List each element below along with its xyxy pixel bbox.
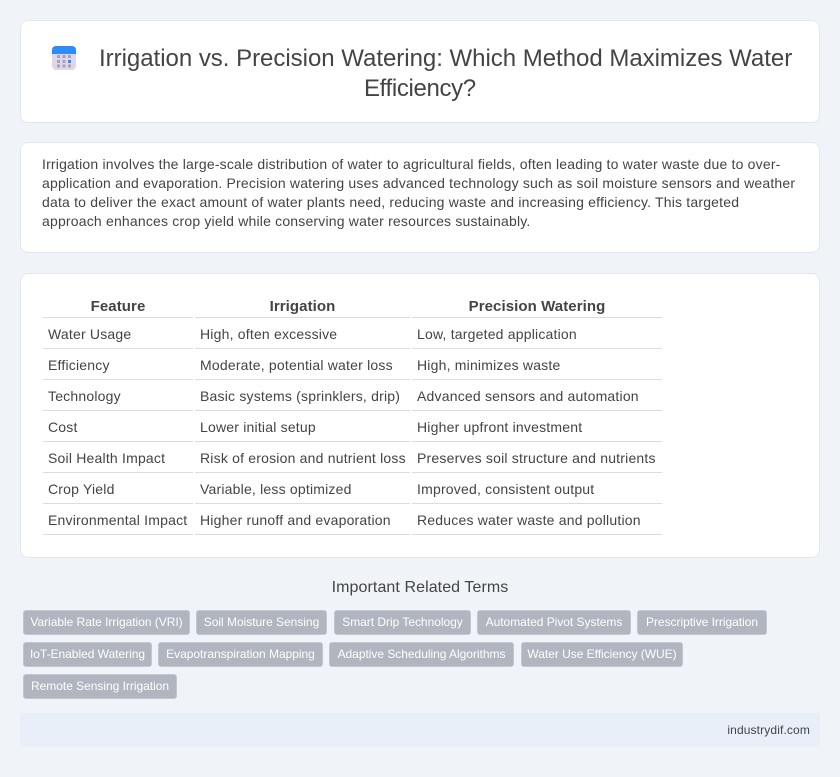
- title: [99, 45, 792, 102]
- tag list: related terms: Smart Drip Technology: [342, 615, 463, 629]
- tag list: related terms: Automated Pivot Systems: [486, 615, 622, 629]
- table: feature comparison: Risk of erosion and nutrient loss: [200, 450, 406, 466]
- text block: introduction paragraph: application and evaporation. Precision watering uses advanced technology such as soil moisture sensors and weather: [42, 175, 795, 191]
- tag list: related terms: Remote Sensing Irrigation: [31, 679, 169, 693]
- table header: [43, 298, 662, 318]
- footer bar: [20, 713, 820, 747]
- panel: comparison table: [20, 273, 820, 558]
- title: Efficiency?: [364, 75, 476, 102]
- table: feature comparison: High, minimizes waste: [417, 357, 560, 373]
- table: feature comparison: Higher runoff and evaporation: [200, 512, 391, 528]
- tag list: related terms: Prescriptive Irrigation: [646, 615, 758, 629]
- table: feature comparison: Low, targeted application: [417, 326, 577, 342]
- panel: title card: [20, 20, 820, 123]
- table: feature comparison: Advanced sensors and automation: [417, 388, 639, 404]
- icon: calendar: [52, 46, 76, 70]
- tag list: related terms: Evapotranspiration Mapping: [166, 647, 315, 661]
- title: Irrigation vs. Precision Watering: Which Method Maximizes Water: [99, 45, 792, 72]
- table header: Irrigation: [270, 298, 335, 315]
- table: feature comparison: [43, 298, 662, 535]
- table: feature comparison: Preserves soil structure and nutrients: [417, 450, 656, 466]
- table: feature comparison: Variable, less optimized: [200, 481, 352, 497]
- tag list: related terms: Variable Rate Irrigation (VRI): [30, 615, 183, 629]
- text block: introduction paragraph: approach enhances crop yield while conserving water resources sustainably.: [42, 213, 531, 229]
- tag list: related terms: Adaptive Scheduling Algorithms: [338, 647, 505, 661]
- table: feature comparison: Lower initial setup: [200, 419, 316, 435]
- table: feature comparison: Crop Yield: [48, 481, 115, 497]
- table: feature comparison: Water Usage: [48, 326, 131, 342]
- footer credit: industrydif.com: [727, 723, 810, 737]
- table: feature comparison: High, often excessive: [200, 326, 337, 342]
- table: feature comparison: Soil Health Impact: [48, 450, 165, 466]
- table: feature comparison: Efficiency: [48, 357, 110, 373]
- table: feature comparison: Improved, consistent output: [417, 481, 594, 497]
- text block: introduction paragraph: data to deliver the exact amount of water plants need, reducing waste and increasing efficiency. This targeted: [42, 194, 739, 210]
- table: feature comparison: Moderate, potential water loss: [200, 357, 393, 373]
- table: feature comparison: Environmental Impact: [48, 512, 187, 528]
- tag list: related terms: Soil Moisture Sensing: [204, 615, 319, 629]
- text block: introduction paragraph: [42, 156, 795, 229]
- tag list: related terms: IoT-Enabled Watering: [30, 647, 145, 661]
- tag list: related terms: [23, 610, 767, 699]
- panel: introduction: [20, 142, 820, 253]
- heading: related terms: Important Related Terms: [332, 579, 508, 596]
- table: feature comparison: Higher upfront investment: [417, 419, 582, 435]
- table: feature comparison: Basic systems (sprinklers, drip): [200, 388, 400, 404]
- table: feature comparison: Reduces water waste and pollution: [417, 512, 641, 528]
- table header: Precision Watering: [469, 298, 605, 315]
- text block: introduction paragraph: Irrigation involves the large-scale distribution of water to agricultural fields, often leading to water waste due to over-: [42, 156, 781, 172]
- table header: Feature: [91, 298, 145, 315]
- tag list: related terms: Water Use Efficiency (WUE): [527, 647, 677, 661]
- table: feature comparison: Cost: [48, 419, 78, 435]
- table: feature comparison: Technology: [48, 388, 121, 404]
